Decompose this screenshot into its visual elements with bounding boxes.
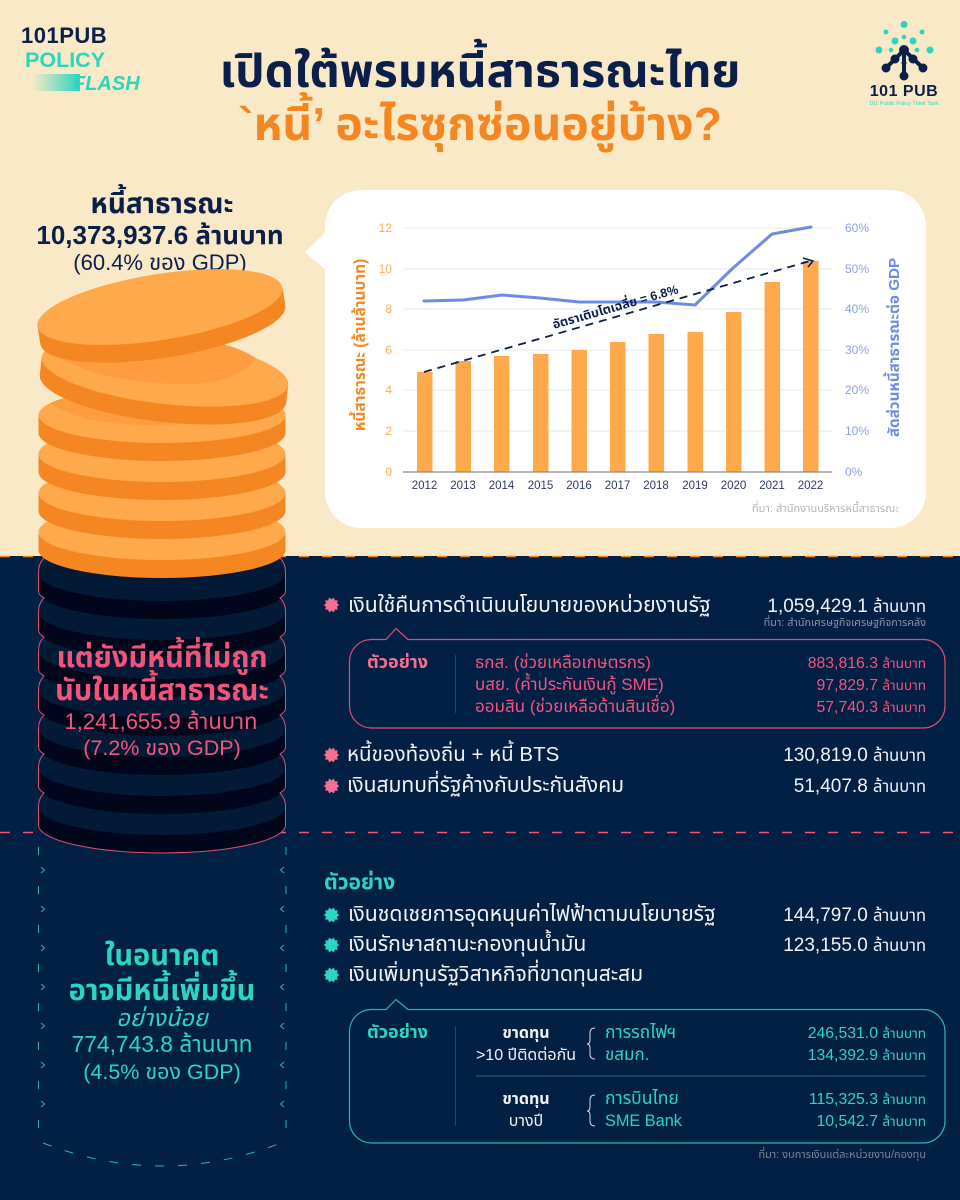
callout: state enterprise examples: การรถไฟฯ [605, 1022, 676, 1042]
list: hidden debt items: 51,407.8 ล้านบาท [794, 776, 926, 797]
callout: state enterprise examples: >10 ปีติดต่อกัน [476, 1046, 576, 1064]
chart: public debt bars and GDP ratio line: 60% [845, 221, 869, 235]
callout: hidden debt examples: 57,740.3 ล้านบาท [816, 699, 926, 716]
hidden debt label: แต่ยังมีหนี้ที่ไม่ถูก [56, 636, 268, 675]
hidden debt label [55, 636, 269, 760]
chart: public debt bars and GDP ratio line: 2018 [643, 480, 669, 492]
public debt headline: หนี้สาธารณะ [90, 183, 234, 219]
chart: public debt bars and GDP ratio line: 2015 [528, 480, 553, 492]
logo: 101PUB Policy Flash: FLASH [73, 73, 140, 95]
chart: public debt bars and GDP ratio line: 2017 [605, 480, 630, 492]
logo: 101PUB Policy Flash: 101PUB [21, 23, 107, 48]
callout: hidden debt examples: 97,829.7 ล้านบาท [816, 677, 926, 694]
list: hidden debt items: 1,059,429.1 ล้านบาท [767, 596, 926, 617]
chart: public debt bars and GDP ratio line: 12 [379, 221, 392, 235]
callout: state enterprise examples: 115,325.3 ล้านบาท [809, 1091, 926, 1108]
chart: public debt bars and GDP ratio line: 40% [845, 302, 869, 316]
callout: state enterprise examples: ขาดทุน [502, 1025, 550, 1042]
callout: hidden debt examples: ตัวอย่าง [367, 652, 428, 672]
title: เปิดใต้พรมหนี้สาธารณะไทย [220, 38, 740, 97]
callout: hidden debt examples: ธกส. (ช่วยเหลือเกษตรกร) [475, 653, 651, 672]
list: future debt items: เงินเพิ่มทุนรัฐวิสาหกิจที่ขาดทุนสะสม [348, 959, 643, 987]
list: hidden debt items [324, 593, 926, 797]
background: navy lower section [0, 556, 960, 1200]
dark coin stack: hidden debt [38, 545, 286, 853]
list: future debt items [324, 871, 926, 987]
chart: public debt bars and GDP ratio line: 0 [385, 465, 392, 479]
list: future debt items: เงินชดเชยการอุดหนุนค่าไฟฟ้าตามนโยบายรัฐ [348, 902, 716, 927]
list: hidden debt items: เงินใช้คืนการดำเนินนโยบายของหน่วยงานรัฐ [348, 593, 711, 617]
logo: 101 PUB network mark: 101 Public Policy Think Tank [869, 101, 939, 107]
chart: public debt bars and GDP ratio line: 20% [845, 383, 869, 397]
title [220, 38, 740, 152]
future debt label: (4.5% ของ GDP) [83, 1060, 241, 1084]
list: future debt items: 123,155.0 ล้านบาท [783, 935, 926, 956]
chart: public debt bars and GDP ratio line: 2019 [682, 480, 708, 492]
chart: public debt bars and GDP ratio line: 2021 [759, 480, 785, 492]
list: hidden debt items: 130,819.0 ล้านบาท [783, 745, 926, 766]
public debt headline: (60.4% ของ GDP) [73, 250, 247, 275]
future debt dashed cylinder [38, 847, 286, 1166]
callout: hidden debt examples: บสย. (ค้ำประกันเงินกู้ SME) [475, 672, 664, 696]
title: `หนี้’ อะไรซุกซ่อนอยู่บ้าง? [238, 91, 722, 152]
logo: 101PUB Policy Flash [21, 23, 140, 95]
chart: public debt bars and GDP ratio line: 6 [385, 343, 392, 357]
chart: public debt bars and GDP ratio line: 2 [385, 424, 392, 438]
future debt label: 774,743.8 ล้านบาท [72, 1031, 252, 1057]
callout: state enterprise examples: ขสมก. [605, 1045, 649, 1064]
list: future debt items: ตัวอย่าง [324, 871, 395, 894]
hidden debt label: นับในหนี้สาธารณะ [55, 669, 269, 707]
source note: ที่มา: งบการเงินแต่ละหน่วยงาน/กองทุน [758, 1147, 926, 1161]
chart: public debt bars and GDP ratio line: สัดส่วนหนี้สาธารณะต่อ GDP [883, 258, 903, 437]
chart: public debt bars and GDP ratio line: 2013 [450, 480, 476, 492]
list: future debt items: เงินรักษาสถานะกองทุนน้ำมัน [348, 929, 586, 957]
list: future debt items: 144,797.0 ล้านบาท [783, 905, 926, 926]
chart: public debt bars and GDP ratio line: อัตราเติบโตเฉลี่ย = 6.8% [550, 281, 680, 332]
list: hidden debt items: ที่มา: สำนักเศรษฐกิจเศรษฐกิจการคลัง [764, 615, 926, 629]
future debt label [69, 940, 255, 1084]
chart: public debt bars and GDP ratio line [348, 221, 903, 515]
chart: public debt bars and GDP ratio line: 8 [385, 302, 392, 316]
callout: hidden debt examples: 883,816.3 ล้านบาท [808, 655, 926, 672]
public debt headline: 10,373,937.6 ล้านบาท [36, 220, 284, 250]
future debt label: ในอนาคต [105, 940, 219, 972]
hidden debt label: (7.2% ของ GDP) [83, 736, 241, 760]
logo: 101PUB Policy Flash: POLICY [25, 48, 105, 72]
chart: public debt bars and GDP ratio line: 30% [845, 343, 869, 357]
chart: public debt bars and GDP ratio line: 2022 [798, 480, 823, 492]
callout: state enterprise examples: ตัวอย่าง [367, 1022, 428, 1042]
callout: hidden debt examples [350, 628, 945, 728]
orange coin stack: public debt [32, 255, 292, 578]
chart: public debt bars and GDP ratio line: 2020 [721, 480, 746, 492]
chart: public debt bars and GDP ratio line: 50% [845, 262, 869, 276]
callout: state enterprise examples: SME Bank [605, 1112, 683, 1130]
callout: state enterprise examples: 10,542.7 ล้านบาท [816, 1113, 926, 1130]
callout: hidden debt examples: ออมสิน (ช่วยเหลือด้านสินเชื่อ) [475, 694, 675, 716]
callout: state enterprise examples [350, 1000, 945, 1143]
callout: state enterprise examples: การบินไทย [605, 1088, 679, 1108]
chart: public debt bars and GDP ratio line: 0% [845, 465, 863, 479]
chart: public debt bars and GDP ratio line: 2016 [566, 480, 592, 492]
chart: public debt bars and GDP ratio line: 4 [385, 383, 392, 397]
list: hidden debt items: หนี้ของท้องถิ่น + หนี้ BTS [347, 740, 559, 766]
callout: state enterprise examples: 246,531.0 ล้านบาท [808, 1025, 926, 1042]
chart: public debt bars and GDP ratio line: 2014 [489, 480, 515, 492]
hidden debt label: 1,241,655.9 ล้านบาท [65, 709, 257, 734]
callout: state enterprise examples: บางปี [509, 1113, 543, 1130]
chart: public debt bars and GDP ratio line: หนี้สาธารณะ (ล้านล้านบาท) [348, 259, 369, 431]
chart: public debt bars and GDP ratio line: 10 [379, 262, 392, 276]
chart: public debt bars and GDP ratio line: 2012 [412, 480, 437, 492]
panel: chart card [305, 190, 926, 528]
future debt label: อาจมีหนี้เพิ่มขึ้น [69, 969, 255, 1007]
future debt label: อย่างน้อย [116, 1005, 210, 1031]
chart: public debt bars and GDP ratio line: 10% [845, 424, 869, 438]
callout: state enterprise examples: 134,392.9 ล้านบาท [808, 1047, 926, 1064]
chart: public debt bars and GDP ratio line: ที่มา: สำนักงานบริหารหนี้สาธารณะ [752, 500, 899, 515]
logo: 101 PUB network mark [869, 21, 939, 107]
background: cream top section [0, 0, 960, 556]
logo: 101 PUB network mark: 101 PUB [870, 83, 938, 100]
list: hidden debt items: เงินสมทบที่รัฐค้างกับประกันสังคม [347, 770, 624, 797]
public debt headline [36, 183, 284, 275]
callout: state enterprise examples: ขาดทุน [502, 1091, 550, 1108]
